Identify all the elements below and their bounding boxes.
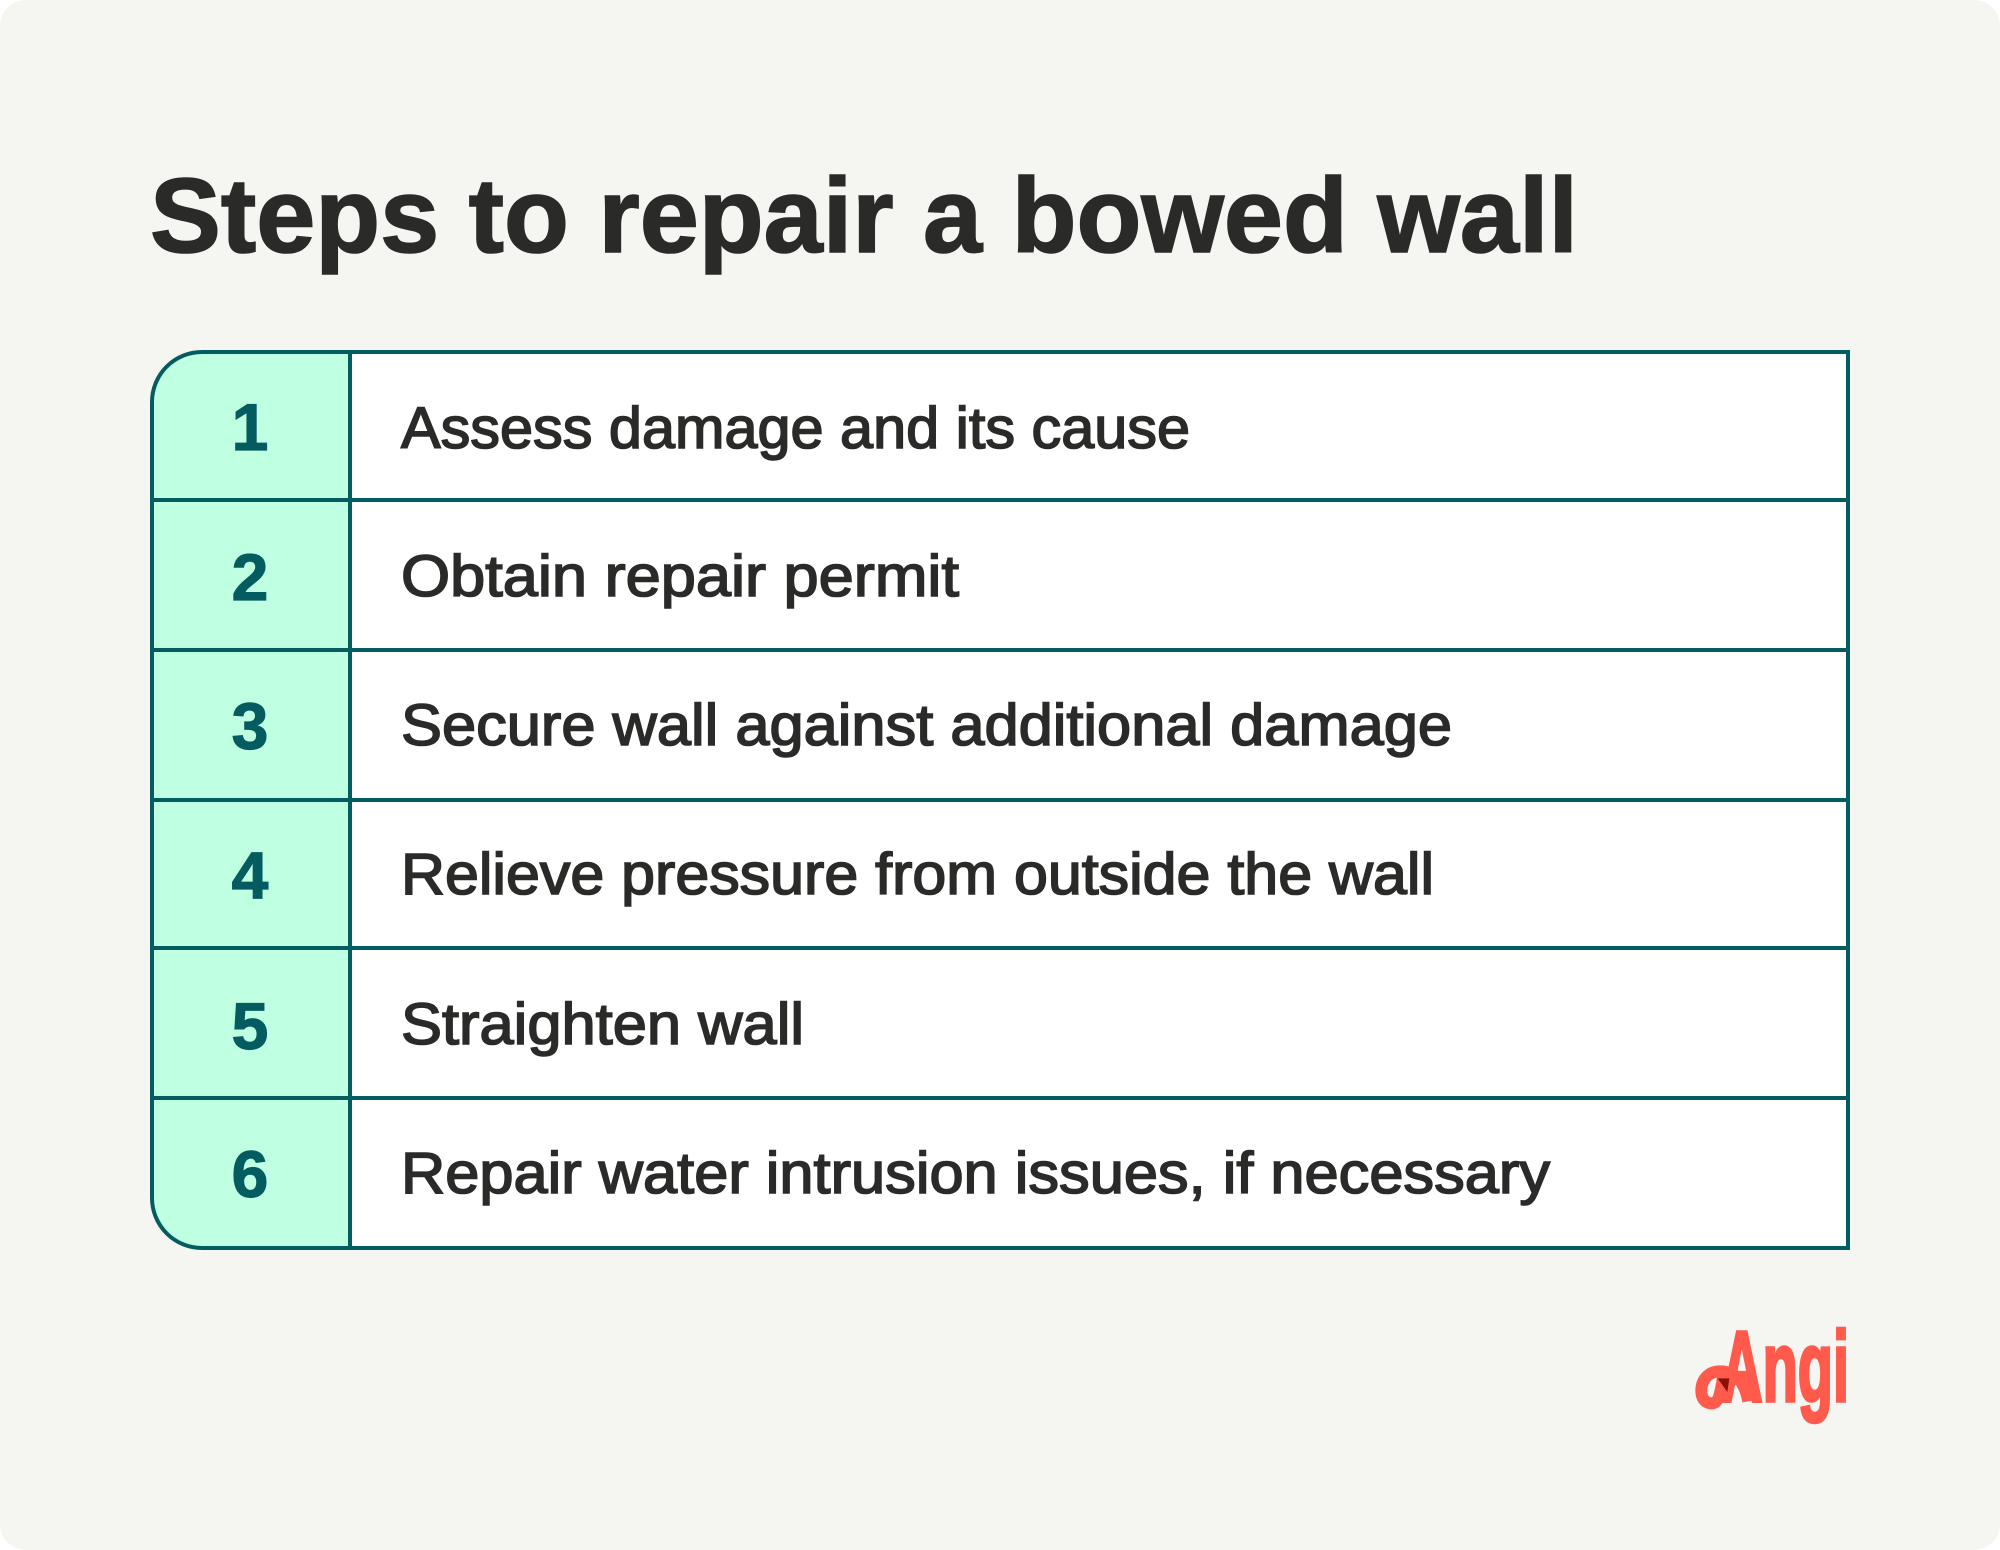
content column [350, 352, 1848, 1248]
step 2: 2 [232, 540, 268, 614]
step 2 [232, 540, 959, 614]
step 4: 4 [232, 838, 269, 912]
step 2: Obtain repair permit [401, 544, 959, 609]
step 4: Relieve pressure from outside the wall [401, 842, 1434, 907]
step 6: Repair water intrusion issues, if necessary [401, 1141, 1550, 1206]
logo: Angi [1701, 1311, 1849, 1423]
step 1: 1 [232, 390, 268, 464]
step 1: Assess damage and its cause [401, 396, 1190, 461]
table of steps [152, 352, 1848, 1248]
title: Steps to repair a bowed wall [150, 157, 1578, 275]
number column [152, 352, 350, 1248]
step 3: Secure wall against additional damage [401, 693, 1452, 758]
step 6: 6 [232, 1137, 268, 1211]
step 5 [232, 989, 804, 1063]
step 5: Straighten wall [401, 992, 804, 1057]
step 5: 5 [232, 989, 268, 1063]
logo: Angi: Angi [1721, 1311, 1849, 1423]
step 3: 3 [232, 689, 268, 763]
